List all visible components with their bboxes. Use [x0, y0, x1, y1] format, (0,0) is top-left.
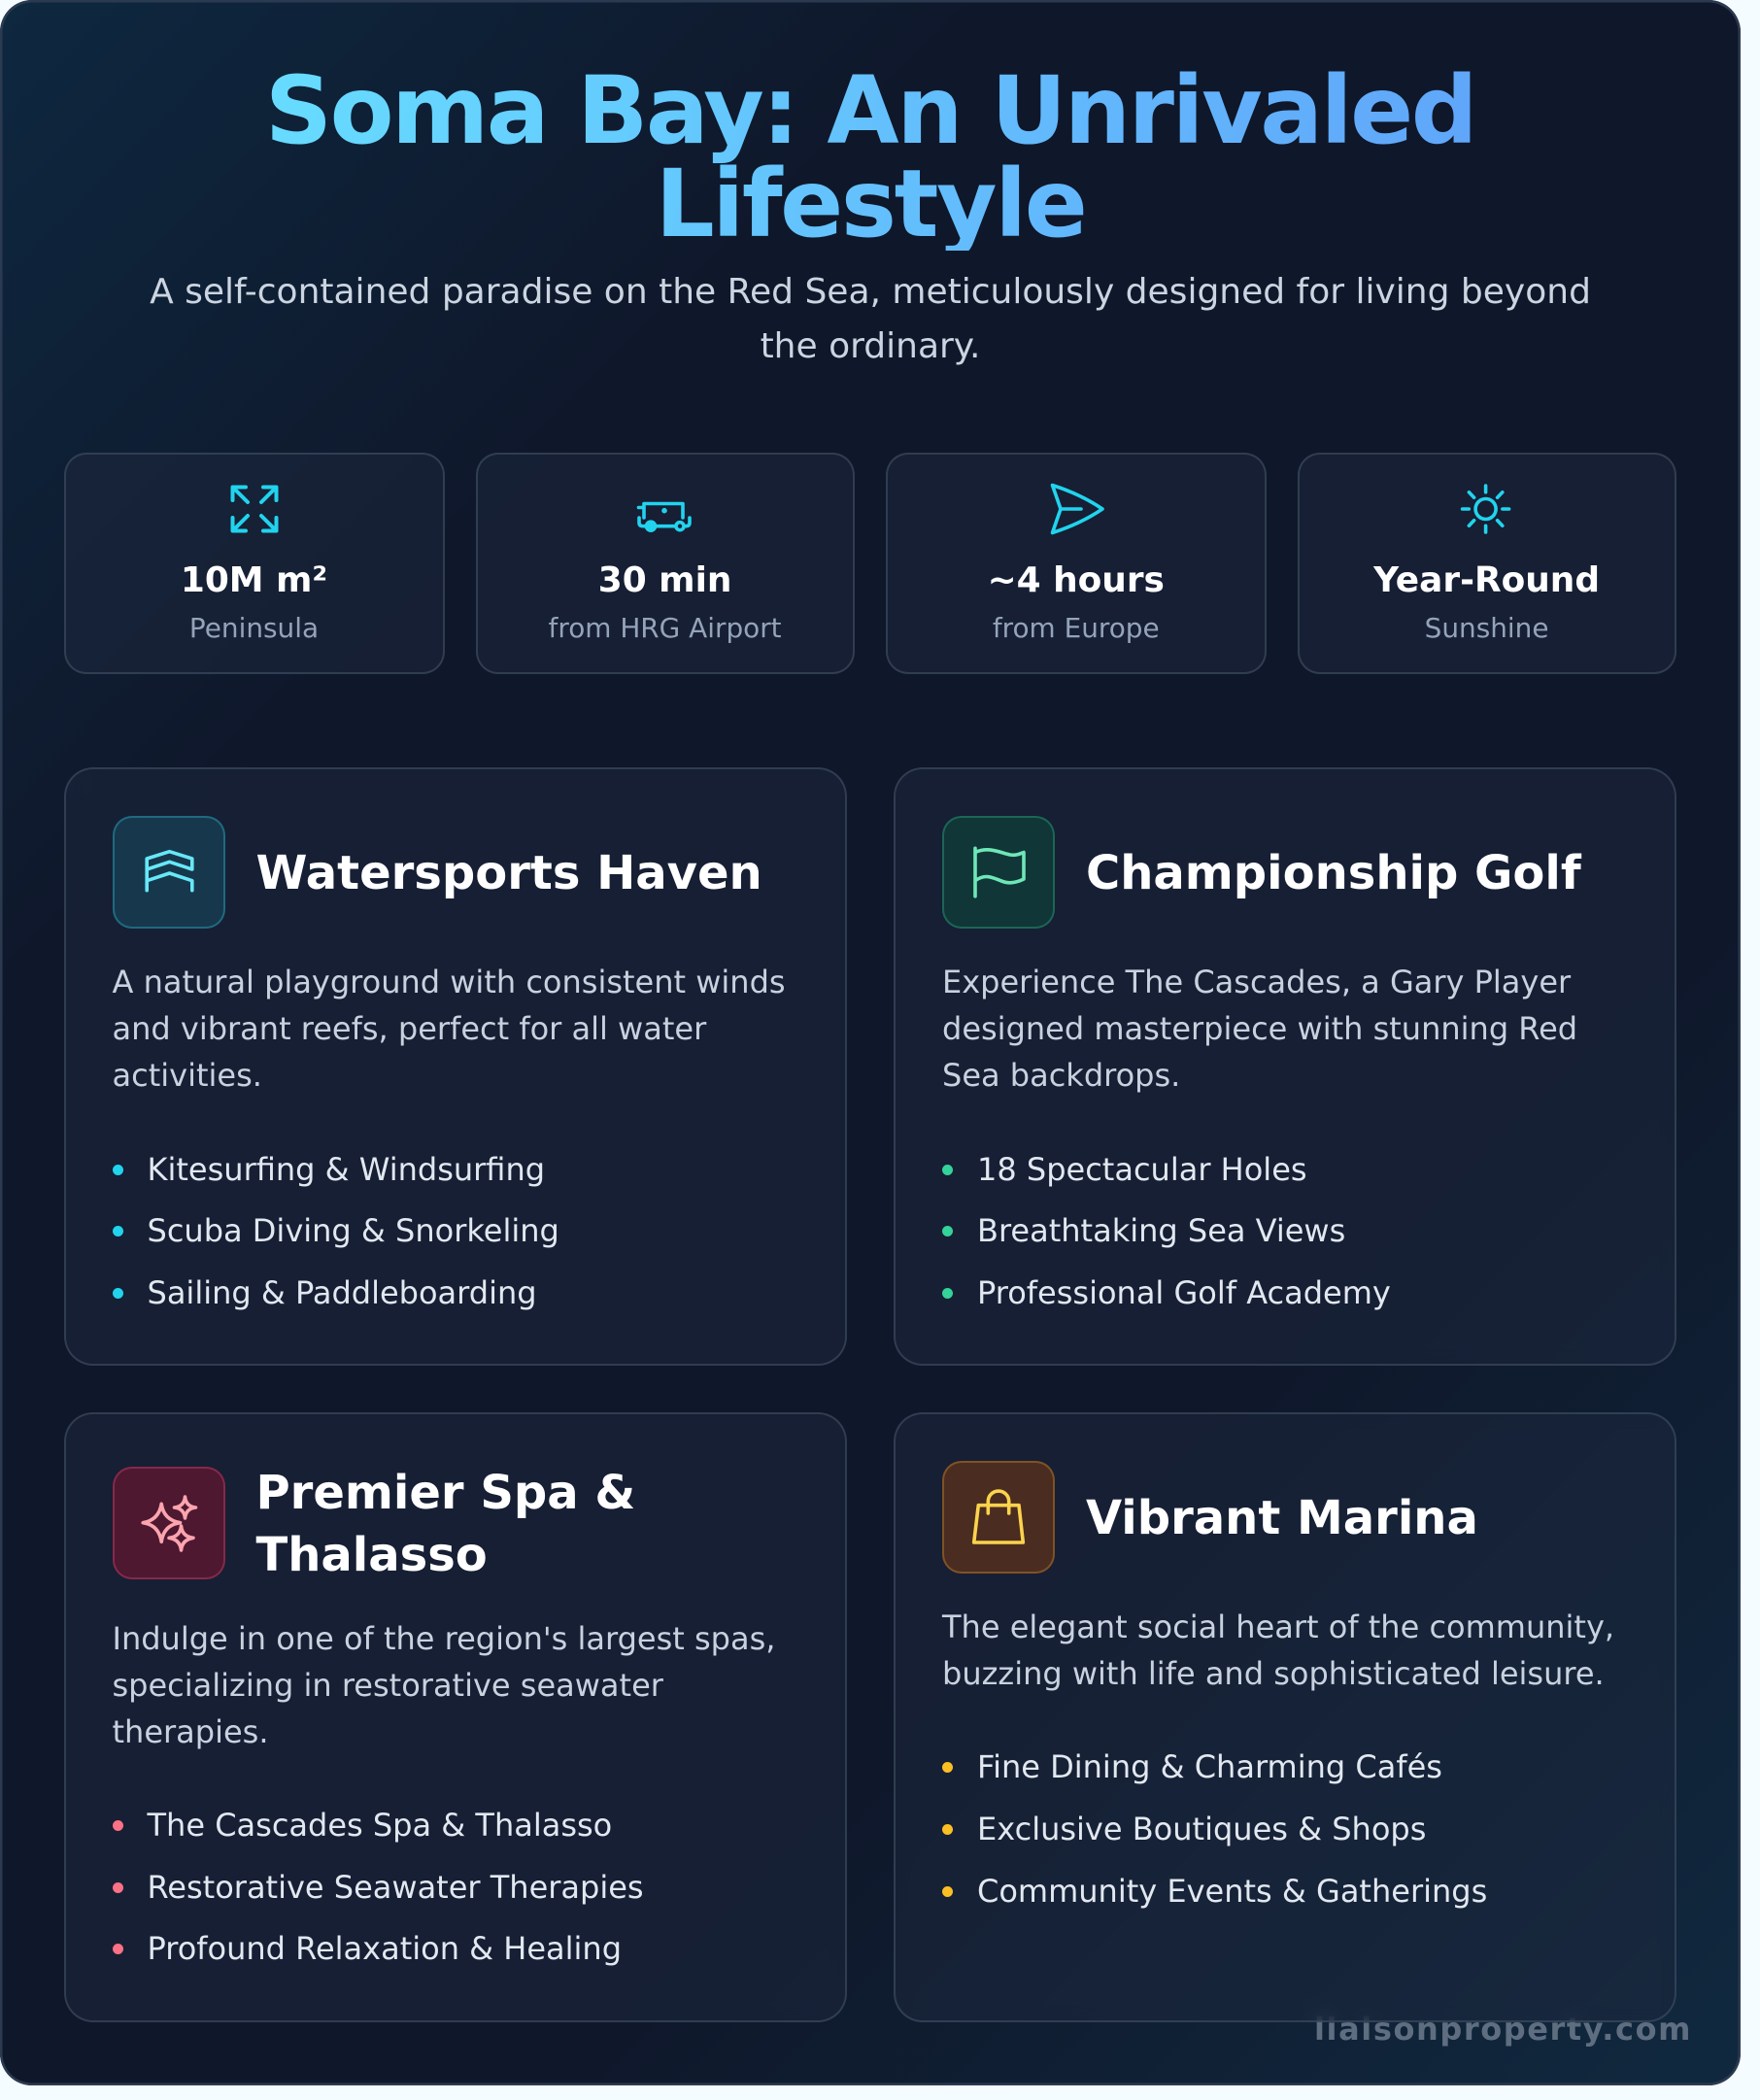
description: Experience The Cascades, a Gary Player — [942, 964, 1571, 1000]
feature list: Fine Dining & Charming Cafés — [977, 1748, 1442, 1785]
description — [942, 1609, 1614, 1692]
heading: Premier Spa & — [256, 1466, 635, 1520]
stat label: from Europe — [993, 612, 1160, 644]
icon: flag — [942, 816, 1055, 929]
feature list: Profound Relaxation & Healing — [148, 1930, 622, 1967]
feature list — [942, 1150, 1391, 1311]
stat value: 10M m² — [181, 560, 327, 600]
feature list: Community Events & Gatherings — [977, 1873, 1487, 1910]
title: Soma Bay: An Unrivaled — [265, 56, 1475, 165]
description — [942, 964, 1577, 1094]
description — [113, 964, 786, 1094]
heading — [256, 1466, 635, 1582]
stat: peninsula size — [64, 453, 445, 674]
description: therapies. — [113, 1713, 269, 1750]
stat value: 30 min — [598, 560, 731, 600]
subtitle: A self-contained paradise on the Red Sea, meticulously designed for living beyond — [150, 272, 1591, 312]
title — [263, 64, 1477, 251]
feature list: Restorative Seawater Therapies — [148, 1869, 644, 1906]
feature list: Exclusive Boutiques & Shops — [977, 1811, 1426, 1847]
heading: Championship Golf — [1086, 846, 1581, 900]
watermark: liaisonproperty.com — [1314, 2011, 1692, 2048]
description: A natural playground with consistent winds — [113, 964, 786, 1000]
panel: watersports — [64, 767, 847, 1366]
stat: flight time — [886, 453, 1267, 674]
stat label: from HRG Airport — [549, 612, 782, 644]
description — [113, 1620, 775, 1750]
icon: waves — [113, 816, 225, 929]
feature list: Professional Golf Academy — [977, 1274, 1391, 1311]
title: Lifestyle — [656, 150, 1085, 258]
description: buzzing with life and sophisticated leisure. — [942, 1655, 1605, 1692]
description: Sea backdrops. — [942, 1057, 1180, 1094]
stat label: Sunshine — [1425, 612, 1549, 644]
feature list: 18 Spectacular Holes — [977, 1150, 1307, 1187]
description: activities. — [113, 1057, 262, 1094]
subtitle: the ordinary. — [761, 326, 980, 366]
icon: sparkles — [113, 1467, 225, 1579]
description: designed masterpiece with stunning Red — [942, 1010, 1577, 1047]
stat value: Year-Round — [1373, 560, 1600, 600]
heading: Watersports Haven — [256, 846, 762, 900]
feature list — [113, 1150, 559, 1311]
icon: paper plane — [1051, 484, 1104, 534]
stat label: Peninsula — [189, 612, 319, 644]
stat: sunshine — [1298, 453, 1676, 674]
description: Indulge in one of the region's largest spas, — [113, 1620, 775, 1657]
feature list: The Cascades Spa & Thalasso — [148, 1807, 612, 1844]
panel: golf — [894, 767, 1676, 1366]
feature list: Kitesurfing & Windsurfing — [148, 1150, 545, 1187]
subtitle — [150, 272, 1591, 366]
feature list — [113, 1807, 644, 1967]
feature list: Scuba Diving & Snorkeling — [148, 1212, 559, 1249]
panel: spa — [64, 1412, 847, 2022]
description: The elegant social heart of the community, — [942, 1609, 1614, 1645]
description: specializing in restorative seawater — [113, 1667, 663, 1704]
feature list: Sailing & Paddleboarding — [148, 1274, 537, 1311]
stat: airport distance — [476, 453, 855, 674]
description: and vibrant reefs, perfect for all water — [113, 1010, 706, 1047]
feature list — [942, 1748, 1487, 1910]
icon: shopping bag — [942, 1461, 1055, 1574]
icon: sun — [1461, 484, 1511, 534]
icon: expand arrows — [231, 486, 278, 532]
heading: Vibrant Marina — [1086, 1491, 1478, 1545]
stat value: ~4 hours — [988, 560, 1165, 600]
heading: Thalasso — [256, 1528, 488, 1582]
icon: shuttle bus — [637, 501, 692, 532]
panel: marina — [894, 1412, 1676, 2022]
feature list: Breathtaking Sea Views — [977, 1212, 1345, 1249]
